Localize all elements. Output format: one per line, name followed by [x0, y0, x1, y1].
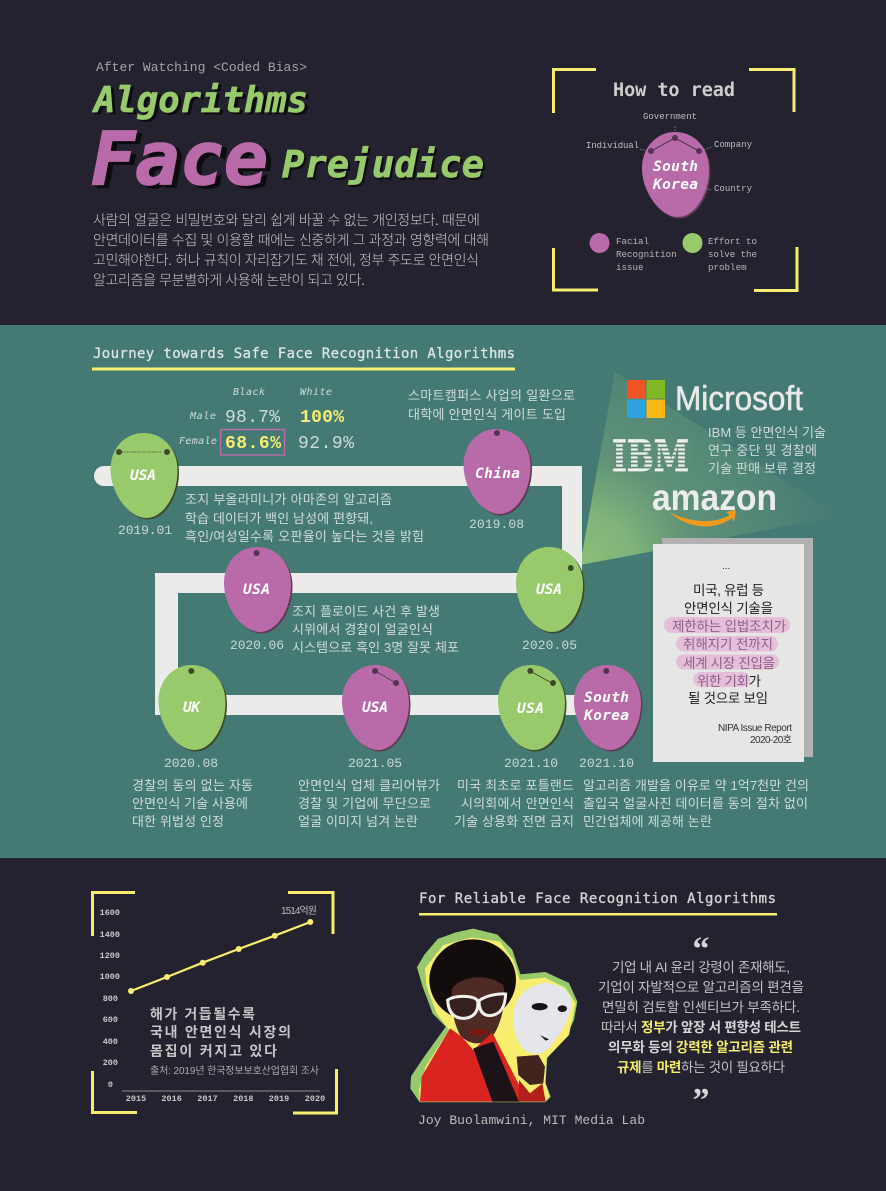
diagram: face key — [586, 112, 753, 218]
text: IBM decision: IBM 등 안면인식 기술 — [708, 425, 826, 440]
chart caption: 국내 안면인식 시장의 — [150, 1024, 291, 1040]
x axis: 2018 — [233, 1094, 254, 1104]
text: Portland ban: 미국 최초로 포틀랜드 — [457, 778, 574, 793]
text: Clearview — [298, 778, 440, 829]
excerpt text: 미국, 유럽 등 — [693, 583, 764, 598]
opening quote mark: “ — [692, 931, 710, 968]
legend: facial recognition issue: Recognition — [616, 249, 677, 260]
stats table: accuracy by gender and race: Male — [189, 411, 216, 422]
diagram: face key: Korea — [652, 177, 698, 193]
light beam from USA node to companies — [580, 372, 840, 565]
node: USA 2019.01 — [110, 433, 179, 538]
diagram: face key: Individual — [586, 141, 639, 151]
panel: header background — [0, 0, 886, 325]
stats table: accuracy by gender and race: 68.6% — [225, 434, 281, 454]
excerpt text: 제한하는 입법조치가 — [672, 619, 786, 634]
x axis — [122, 1090, 325, 1104]
y axis labels: 1200 — [100, 951, 120, 961]
stats table: accuracy by gender and race — [179, 387, 354, 455]
text: Floyd protest arrests: 시위에서 경찰이 얼굴인식 — [292, 622, 433, 637]
excerpt text: 안면인식 기술을 — [684, 601, 773, 616]
text: Korean immigration data: 출입국 얼굴사진 데이터를 동의 절차 없이 — [583, 796, 808, 811]
text: IBM decision: 기술 판매 보류 결정 — [708, 461, 816, 476]
node: USA 2020.06: 2020.06 — [230, 638, 284, 653]
value label: 1514억원 — [281, 905, 317, 917]
text: Floyd protest arrests: 시스템으로 흑인 3명 잘못 체포 — [292, 640, 459, 655]
text: Buolamwini finding — [185, 492, 424, 544]
text: Portland ban — [454, 778, 574, 829]
title: Algorithms: Algorithms — [95, 82, 311, 123]
legend: facial recognition issue: issue — [616, 262, 644, 273]
legend: effort to solve the problem: Effort to — [708, 236, 757, 247]
text: UK ruling: 대한 위법성 인정 — [132, 814, 224, 829]
logo: Microsoft: Microsoft — [675, 380, 804, 418]
y axis labels: 0 — [108, 1080, 113, 1090]
heading: journey — [92, 346, 515, 370]
source — [718, 723, 792, 746]
quote text: 의무화 등의 강력한 알고리즘 관련 — [608, 1040, 793, 1055]
y axis labels: 1400 — [100, 930, 120, 940]
node: USA 2021.10: USA — [517, 701, 544, 717]
title: Face: Face — [96, 120, 273, 205]
node: China 2019.08: 2019.08 — [469, 517, 524, 532]
node: USA 2020.06: USA — [243, 582, 270, 598]
stats table: accuracy by gender and race: White — [300, 387, 332, 398]
node: UK 2020.08: 2020.08 — [164, 756, 218, 771]
document: NIPA report excerpt — [653, 538, 813, 762]
text: UK ruling: 경찰의 동의 없는 자동 — [132, 778, 253, 793]
excerpt text: 세계 시장 진입을 — [683, 656, 775, 671]
legend: effort to solve the problem: problem — [708, 262, 747, 273]
text: Floyd protest arrests — [292, 604, 459, 655]
quote text: 기업이 자발적으로 알고리즘의 편견을 — [598, 980, 804, 995]
node: USA 2020.05: USA — [536, 582, 562, 598]
node: USA 2020.05: 2020.05 — [522, 638, 577, 653]
text: Clearview: 안면인식 업체 클리어뷰가 — [298, 778, 440, 793]
frame brackets — [554, 70, 797, 290]
text: IBM decision — [708, 425, 826, 476]
intro paragraph: 알고리즘을 무분별하게 사용해 논란이 되고 있다. — [93, 272, 365, 288]
text: UK ruling — [132, 778, 253, 829]
text: Buolamwini finding: 조지 부올라미니가 아마존의 알고리즘 — [185, 492, 392, 507]
quote text — [598, 960, 804, 1075]
quote text: 규제를 마련하는 것이 필요하다 — [617, 1060, 786, 1075]
timeline track — [94, 466, 600, 715]
y axis labels: 1600 — [100, 908, 120, 918]
chart caption: 해가 거듭될수록 — [150, 1006, 255, 1022]
text: Korean immigration data: 민간업체에 제공해 논란 — [583, 814, 712, 829]
y axis labels: 800 — [103, 994, 118, 1004]
intro paragraph: 고민해야한다. 허나 규칙이 자리잡기도 채 전에, 정부 주도로 안면인식 — [93, 252, 479, 268]
source: 2020-20호 — [750, 734, 792, 746]
excerpt text: 취해지기 전까지 — [683, 637, 773, 652]
quote text: 면밀히 검토할 인센티브가 부족하다. — [602, 1000, 800, 1015]
stats table: accuracy by gender and race: Black — [233, 387, 265, 398]
node: USA 2021.05: USA — [362, 700, 388, 716]
intro paragraph: 안면데이터를 수집 및 이용할 때에는 신중하게 그 과정과 영향력에 대해 — [93, 232, 489, 248]
title: Prejudice: Prejudice — [282, 143, 484, 186]
text: Floyd protest arrests: 조지 플로이드 사건 후 발생 — [292, 604, 440, 619]
excerpt text: 될 것으로 보임 — [688, 691, 768, 706]
caption: Joy Buolamwini: Joy Buolamwini, MIT Media Lab — [418, 1113, 645, 1128]
closing quote mark: ” — [692, 1082, 710, 1119]
text: smart campus: 대학에 안면인식 게이트 도입 — [408, 407, 566, 422]
panel: market line chart — [92, 892, 336, 1113]
node: USA 2020.06 — [224, 547, 292, 653]
node: South Korea 2021.10 — [574, 665, 642, 771]
x axis: 2017 — [197, 1094, 218, 1104]
text: IBM decision: 연구 중단 및 경찰에 — [708, 443, 817, 458]
logo: amazon: amazon — [652, 477, 777, 518]
x axis: 2015 — [126, 1094, 146, 1104]
text: Portland ban: 기술 상용화 전면 금지 — [454, 814, 574, 829]
intro paragraph — [93, 212, 489, 288]
quote — [598, 931, 804, 1119]
node: USA 2019.01: USA — [130, 468, 156, 484]
x axis: 2016 — [161, 1094, 182, 1104]
panel: footer background — [0, 858, 886, 1191]
node: USA 2020.05 — [516, 547, 584, 653]
text: Buolamwini finding: 학습 데이터가 백인 남성에 편향돼, — [185, 511, 373, 526]
node: South Korea 2021.10: South — [584, 690, 629, 706]
legend: facial recognition issue: Facial — [616, 236, 649, 247]
chart caption: 출처: 2019년 한국정보보호산업협회 조사 — [150, 1064, 319, 1077]
stats table: accuracy by gender and race: Female — [179, 436, 217, 447]
stats table: accuracy by gender and race: 100% — [300, 408, 344, 428]
quote text: 기업 내 AI 윤리 강령이 존재해도, — [612, 960, 790, 975]
excerpt text — [672, 561, 786, 706]
y axis labels: 200 — [103, 1058, 118, 1068]
diagram: face key: Country — [714, 184, 753, 194]
node: USA 2019.01: 2019.01 — [118, 523, 172, 538]
logo: IBM: IBM — [612, 432, 689, 482]
legend: effort to solve the problem: solve the — [708, 249, 757, 260]
node: USA 2021.05 — [342, 665, 410, 771]
title: Face: Face — [91, 117, 268, 202]
text: Korean immigration data: 알고리즘 개발을 이유로 약 1억7천만 건의 — [583, 778, 809, 793]
title block — [91, 60, 489, 288]
diagram: face key: Company — [714, 140, 753, 150]
line series — [128, 919, 313, 994]
excerpt text: 위한 기회가 — [697, 674, 761, 689]
heading: how to read: How to read — [613, 80, 735, 101]
node: South Korea 2021.10: 2021.10 — [579, 756, 634, 771]
text: Clearview: 얼굴 이미지 넘겨 논란 — [298, 814, 418, 829]
diagram: face key: South — [653, 159, 698, 175]
text: smart campus — [408, 388, 575, 422]
quote text: 따라서 정부가 앞장 서 편향성 테스트 — [601, 1020, 801, 1035]
chart brackets — [92, 892, 336, 1113]
heading: reliable algorithms: For Reliable Face Recognition Algorithms — [419, 891, 776, 907]
source: NIPA Issue Report — [718, 723, 792, 734]
title: Algorithms: Algorithms — [92, 80, 308, 121]
title: Prejudice: Prejudice — [284, 145, 486, 188]
legend: facial recognition issue — [590, 233, 677, 273]
y axis labels: 1000 — [100, 972, 120, 982]
node: USA 2021.10 — [498, 665, 566, 771]
x axis: 2020 — [305, 1094, 325, 1104]
node: China 2019.08: China — [475, 466, 520, 482]
text: Portland ban: 시의회에서 안면인식 — [461, 796, 574, 811]
excerpt text: ... — [722, 561, 730, 572]
node: UK 2020.08: UK — [183, 700, 201, 716]
chart caption — [150, 1006, 319, 1077]
text: Buolamwini finding: 흑인/여성일수록 오판율이 높다는 것을 밝힘 — [185, 529, 424, 544]
highlights — [664, 617, 790, 687]
legend: effort to solve the problem — [682, 233, 757, 273]
y axis labels — [100, 908, 120, 1090]
text: Clearview: 경찰 및 기업에 무단으로 — [298, 796, 431, 811]
node: South Korea 2021.10: Korea — [583, 708, 629, 724]
panel: timeline background — [0, 325, 886, 858]
node: USA 2021.05: 2021.05 — [348, 756, 402, 771]
subtitle: After Watching <Coded Bias> — [96, 60, 307, 75]
node: UK 2020.08 — [158, 665, 227, 771]
node: China 2019.08 — [464, 429, 532, 532]
logo: Microsoft — [627, 380, 804, 418]
text: Korean immigration data — [583, 778, 809, 829]
stats table: accuracy by gender and race: 92.9% — [298, 434, 354, 454]
y axis labels: 400 — [103, 1037, 118, 1047]
node: USA 2021.10: 2021.10 — [504, 756, 558, 771]
x axis: 2019 — [269, 1094, 289, 1104]
text: UK ruling: 안면인식 기술 사용에 — [132, 796, 248, 811]
intro paragraph: 사람의 얼굴은 비밀번호와 달리 쉽게 바꿀 수 없는 개인정보다. 때문에 — [93, 212, 480, 228]
y axis labels: 600 — [103, 1015, 118, 1025]
illustration: Joy Buolamwini holding mask — [411, 929, 577, 1102]
heading: journey: Journey towards Safe Face Recognition Algorithms — [93, 346, 515, 362]
text: smart campus: 스마트캠퍼스 사업의 일환으로 — [408, 388, 575, 403]
chart caption: 몸집이 커지고 있다 — [150, 1043, 277, 1059]
panel: how to read — [554, 70, 797, 290]
stats table: accuracy by gender and race: 98.7% — [225, 408, 280, 428]
diagram: face key: Government — [643, 112, 697, 122]
